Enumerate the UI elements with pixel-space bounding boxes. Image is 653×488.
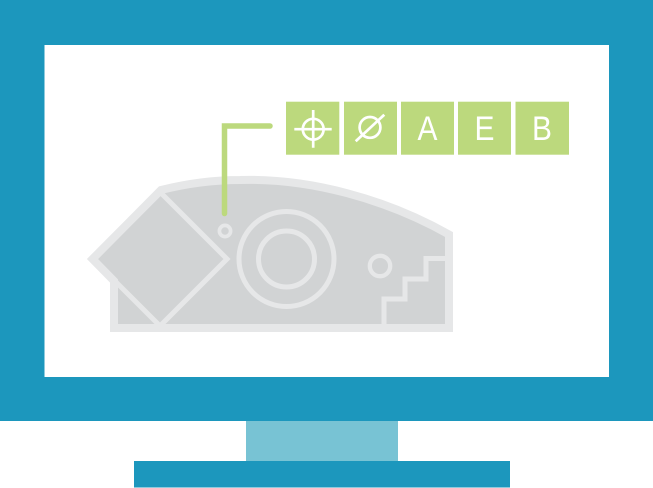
monitor stand base	[134, 461, 510, 488]
cell: datum B: B	[532, 109, 552, 147]
cell: datum E: E	[475, 109, 494, 147]
cell: datum A: A	[418, 109, 438, 147]
diamond lens mount	[93, 192, 227, 326]
cell: diameter symbol	[344, 102, 397, 155]
cell: datum A	[401, 102, 454, 155]
inner lens ring	[258, 231, 314, 287]
cell: position symbol	[286, 102, 339, 155]
stepped cutout	[384, 258, 446, 325]
housing outline	[92, 180, 449, 328]
monitor screen	[44, 45, 609, 377]
technical drawing of projector housing	[92, 180, 449, 328]
outer lens ring	[239, 212, 334, 306]
monitor stand neck	[246, 421, 398, 461]
small datum hole	[219, 225, 231, 237]
right hole	[370, 256, 390, 276]
callout leader line	[224, 126, 270, 214]
cell: datum E	[458, 102, 511, 155]
cell: datum B	[516, 102, 569, 155]
feature control frame	[286, 102, 569, 155]
